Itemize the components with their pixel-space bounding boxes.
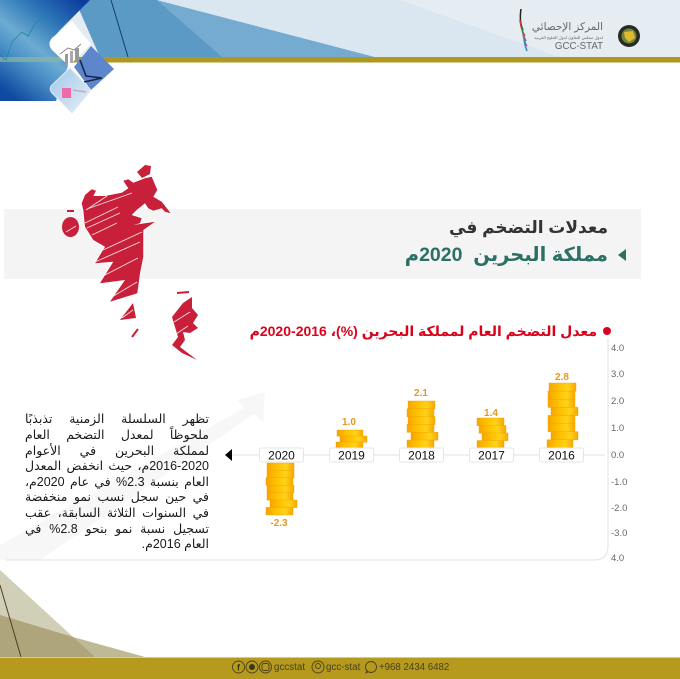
emblem	[618, 25, 640, 47]
coin stack 2018	[407, 401, 438, 448]
y axis labels: -1.0	[611, 477, 627, 488]
y axis labels: 4.0	[611, 343, 624, 354]
footer social icons	[232, 661, 376, 673]
y axis labels: 0.0	[611, 450, 624, 461]
description paragraph: لمملكة البحرين في الأعوام	[25, 444, 209, 458]
description paragraph: العام بنسبة 2.3% في عام 2020م،	[25, 474, 209, 488]
footer gccstat: gccstat	[274, 662, 305, 673]
title marker	[618, 249, 626, 261]
logo ribbon	[520, 9, 527, 51]
facebook and twitter glyphs: f	[237, 662, 241, 672]
blue diamond with dark lines	[74, 46, 114, 90]
y axis labels	[611, 343, 627, 564]
description paragraph: تظهر السلسلة الزمنية تذبذبًا	[25, 412, 209, 426]
description paragraph: ملحوظاً لمعدل التضخم العام	[25, 428, 209, 442]
logo Arabic name: المركز الإحصائي	[532, 21, 603, 33]
title line one: معدلات التضخم في	[449, 218, 608, 237]
header background	[0, 0, 680, 58]
footer gcc-stat: gcc-stat	[326, 662, 360, 673]
coin stack 2020	[266, 463, 297, 515]
facebook and twitter glyphs	[237, 662, 255, 672]
coin stack 2016	[547, 383, 578, 448]
year label boxes	[260, 448, 584, 462]
description paragraph: 2016-2020م، حيث انخفض المعدل	[25, 459, 209, 473]
gold footer bar	[0, 658, 680, 679]
map of Bahrain	[62, 165, 198, 360]
y axis labels: 3.0	[611, 369, 624, 380]
footer phone: +968 2434 6482	[379, 662, 449, 673]
bottom corner shapes	[0, 570, 145, 657]
year labels: 2018	[408, 448, 435, 462]
y axis labels: 2.0	[611, 396, 624, 407]
coin stack 2017	[477, 418, 508, 448]
light diamond with pink rectangle	[50, 68, 91, 113]
description paragraph: في السنوات الثلاثة السابقة، عقب	[25, 506, 209, 520]
year labels: 2017	[478, 448, 505, 462]
value labels: -2.3	[270, 518, 288, 529]
logo Arabic subtitle: لدول مجلس التعاون لدول الخليج العربية	[534, 35, 603, 40]
title line two: مملكة البحرين 2020م	[405, 244, 608, 266]
y axis labels: 4.0	[611, 553, 624, 564]
y axis labels: -3.0	[611, 528, 627, 539]
year labels	[268, 448, 575, 462]
year labels: 2020	[268, 448, 295, 462]
chart title: معدل التضخم العام لمملكة البحرين (%)، 2016-2020م	[250, 323, 597, 339]
white diamond with chart icon	[50, 21, 91, 66]
year labels: 2016	[548, 448, 575, 462]
red bullet	[603, 327, 611, 335]
value labels: 2.8	[555, 372, 569, 383]
description paragraph	[25, 412, 209, 551]
pale rising arrow	[0, 392, 265, 560]
y axis labels: 1.0	[611, 423, 624, 434]
description paragraph: العام 2016م.	[142, 537, 209, 551]
year labels: 2019	[338, 448, 365, 462]
chart frame and axis	[6, 338, 608, 560]
gold header line	[60, 57, 680, 62]
value labels: 1.0	[342, 417, 356, 428]
y axis labels: -2.0	[611, 503, 627, 514]
value labels: 2.1	[414, 388, 428, 399]
logo GCC-STAT: GCC-STAT	[555, 41, 603, 52]
value labels	[270, 372, 569, 529]
coin stack 2019	[336, 430, 367, 448]
left axis arrow	[225, 449, 232, 461]
value labels: 1.4	[484, 408, 498, 419]
blue corner panel	[0, 0, 90, 101]
grey title band	[4, 209, 641, 279]
description paragraph: في حين سجل نسب نمو منخفضة	[25, 490, 209, 504]
description paragraph: تسجيل نسبة نمو بنحو 2.8% في	[25, 522, 209, 536]
